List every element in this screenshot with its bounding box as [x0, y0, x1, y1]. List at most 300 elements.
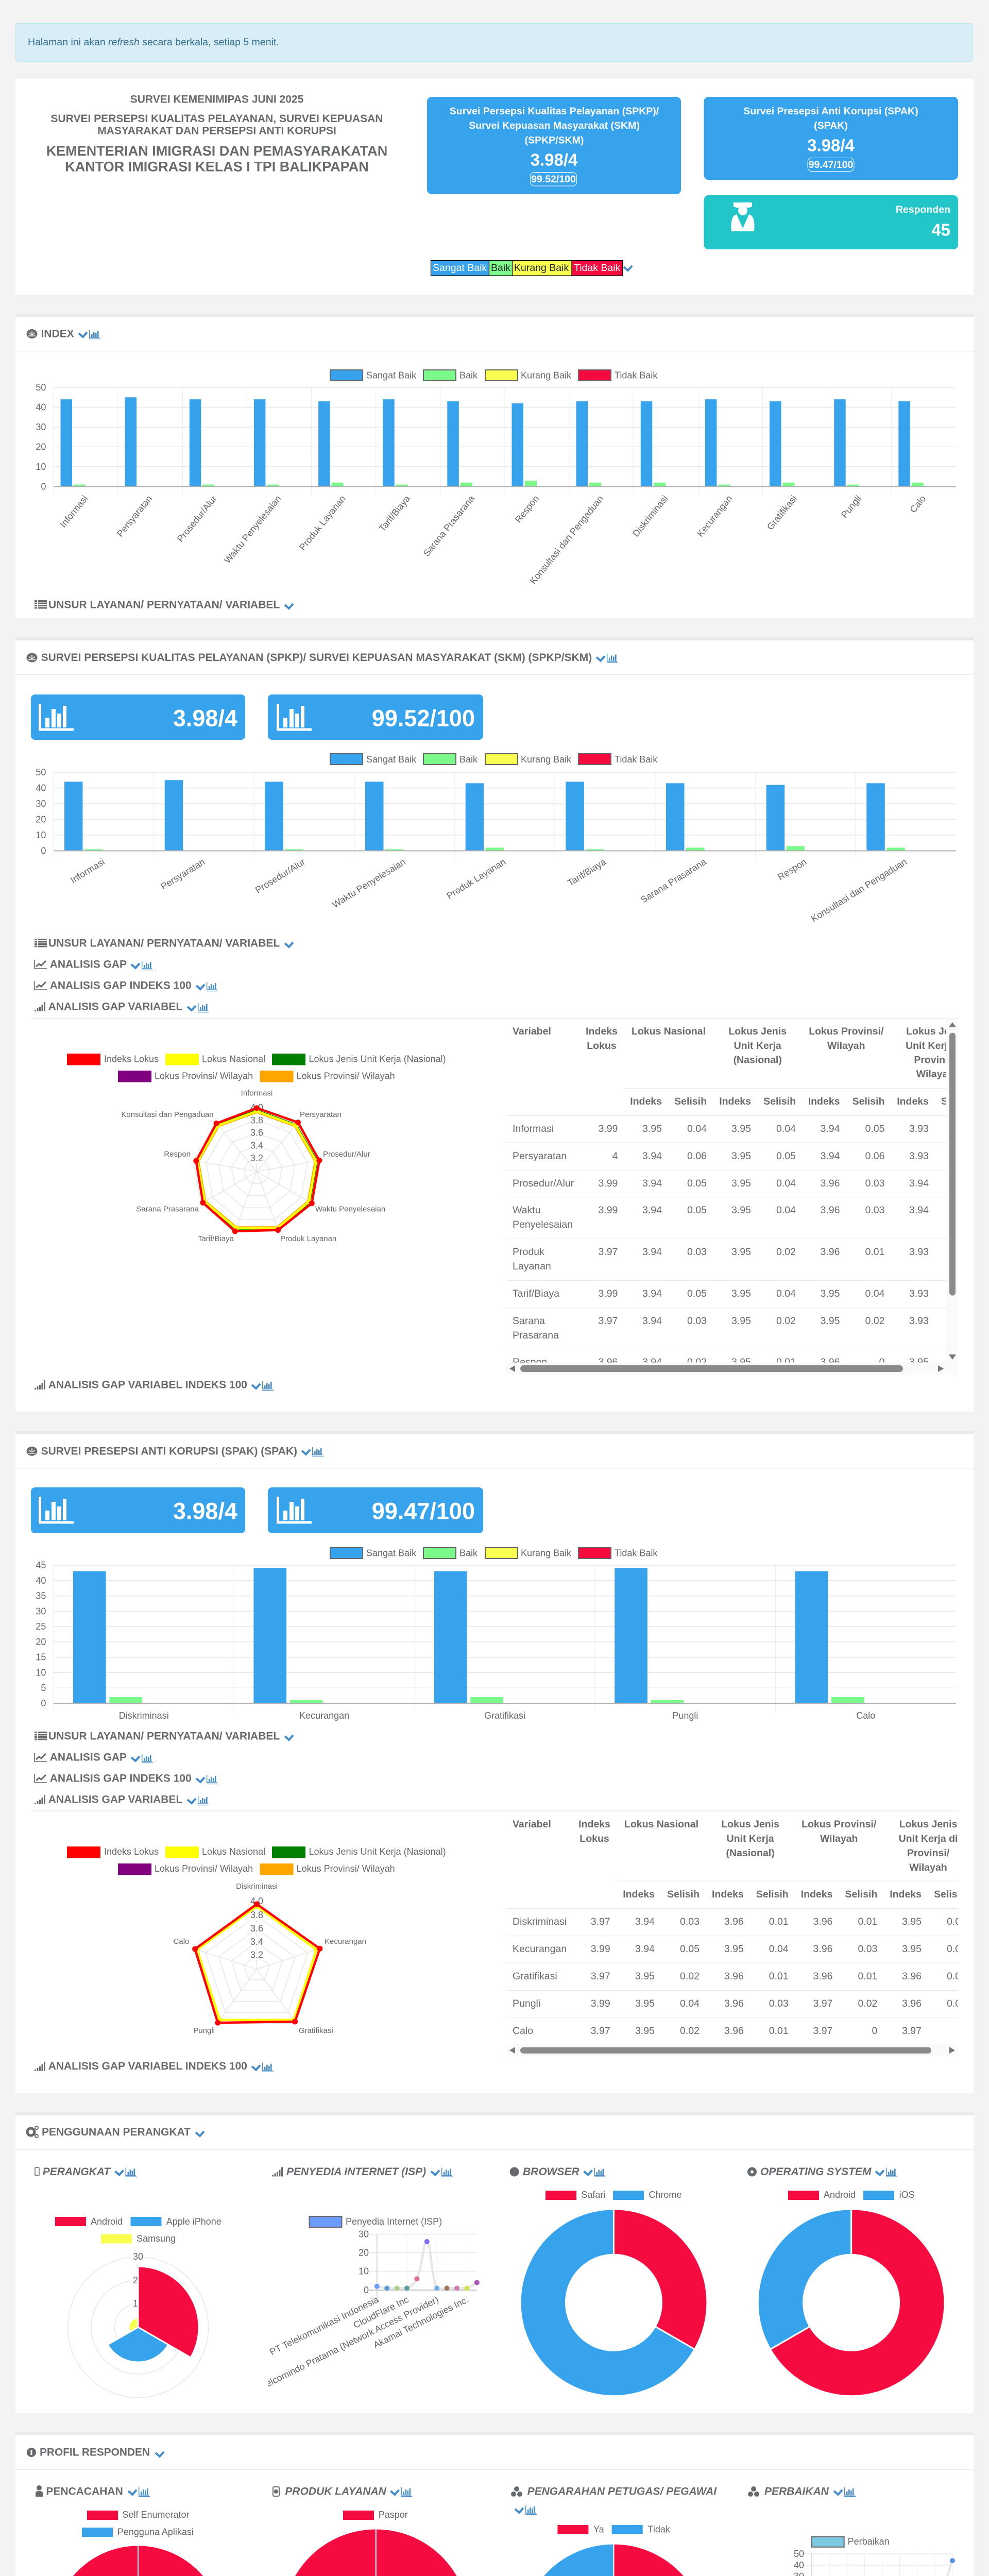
table: gap variabel SPAK: 3.97	[591, 1916, 610, 1927]
heading: analisis gap: ANALISIS GAP	[50, 1752, 127, 1763]
table: gap variabel: 0.04	[865, 1288, 885, 1299]
table: gap variabel: Indeks	[630, 1096, 662, 1107]
table: gap variabel SPAK: Indeks	[712, 1889, 744, 1900]
table: gap variabel: 0.02	[776, 1315, 796, 1327]
table: gap variabel SPAK: Unit Kerja	[727, 1833, 774, 1844]
table: gap variabel: Waktu	[513, 1205, 541, 1216]
table: gap variabel: 3.94	[642, 1178, 662, 1189]
line chart: ISP: 0	[364, 2285, 369, 2295]
table: gap variabel: Prasarana	[513, 1330, 559, 1341]
radar legend: Lokus Jenis Unit Kerja (Nasional)	[309, 1054, 446, 1064]
legend: pengarahan: Ya	[593, 2524, 605, 2534]
subheading: pengarahan petugas	[511, 2485, 717, 2515]
heading: analisis gap indeks 100: ANALISIS GAP INDEKS 100	[50, 1772, 192, 1785]
card: SPKP/SKM score: Survei Persepsi Kualitas Pelayanan (SPKP)/	[450, 106, 659, 117]
table: gap variabel SPAK: 3.94	[635, 1943, 655, 1955]
bar chart: SPKP/SKM elements: 50	[36, 767, 46, 777]
heading: unsur layanan: UNSUR LAYANAN/ PERNYATAAN/ VARIABEL	[48, 599, 280, 611]
table: gap variabel: 3.94	[642, 1315, 662, 1327]
table: gap variabel SPAK: 3.99	[591, 1943, 610, 1955]
title block: SURVEI PERSEPSI KUALITAS PELAYANAN, SURVEI KEPUASAN	[51, 113, 383, 125]
bar chart: index by element: 50	[36, 382, 46, 393]
table: gap variabel SPAK: 3.96	[813, 1916, 832, 1927]
bar chart: SPKP/SKM elements: Waktu Penyelesaian	[330, 857, 407, 910]
radar chart: service variables: Produk Layanan	[280, 1234, 336, 1243]
table: gap variabel: 3.94	[909, 1205, 929, 1216]
table: gap variabel SPAK: 0.03	[680, 1916, 700, 1927]
legend: rating categories: Tidak Baik	[574, 262, 621, 274]
table: gap variabel: 3.94	[821, 1150, 840, 1162]
table: gap variabel: 3.99	[598, 1178, 618, 1189]
radar legend: Indeks Lokus	[104, 1846, 159, 1857]
bar chart: index by element: Gratifikasi	[765, 494, 799, 532]
chart legend: Tidak Baik	[615, 370, 658, 380]
table: gap variabel: 3.94	[642, 1288, 662, 1299]
table: gap variabel SPAK: 3.95	[635, 1971, 655, 1982]
bar chart: SPKP/SKM elements: Prosedur/Alur	[253, 857, 307, 895]
subheading: pengarahan petugas: PENGARAHAN PETUGAS/ PEGAWAI	[527, 2485, 717, 2498]
legend: perangkat: Samsung	[137, 2233, 176, 2244]
doughnut chart: operating system	[758, 2209, 945, 2396]
table: gap variabel SPAK: 3.96	[724, 1916, 744, 1927]
heading: analisis gap	[35, 1752, 153, 1763]
table: gap variabel SPAK: Lokus Provinsi/	[802, 1819, 877, 1830]
table: gap variabel SPAK: 0	[872, 2025, 878, 2037]
table: gap variabel: 0.05	[687, 1288, 707, 1299]
title block: MASYARAKAT DAN PERSEPSI ANTI KORUPSI	[97, 125, 336, 137]
radar chart: service variables: 3.6	[250, 1127, 263, 1138]
table: gap variabel: Sarana	[513, 1315, 545, 1327]
subheading: perbaikan: PERBAIKAN	[764, 2485, 829, 2498]
bar chart: index by element: Diskriminasi	[630, 494, 670, 539]
table: gap variabel SPAK: Lokus Nasional	[624, 1819, 698, 1830]
radar chart: service variables: Informasi	[241, 1089, 272, 1097]
stat: score out of 100: 99.47/100	[372, 1498, 475, 1524]
legend: rating categories: Baik	[491, 262, 510, 274]
radar chart: anti-corruption variables: 3.6	[250, 1923, 263, 1934]
line chart: ISP: 20	[359, 2247, 369, 2258]
heading: analisis gap indeks 100: ANALISIS GAP INDEKS 100	[50, 980, 192, 991]
bar chart: index by element: Respon	[513, 494, 541, 525]
table: gap variabel: Indeks	[586, 1026, 618, 1037]
chart legend	[330, 1548, 658, 1558]
table: gap variabel SPAK: 0.02	[680, 1971, 700, 1982]
table: gap variabel SPAK: 3.95	[902, 1943, 922, 1955]
table: gap variabel: 3.94	[642, 1246, 662, 1258]
table: gap variabel: 0.03	[865, 1205, 885, 1216]
bar chart: index by element: 20	[36, 442, 46, 452]
doughnut chart: pencacahan	[74, 2546, 202, 2576]
table: gap variabel: 3.96	[821, 1246, 840, 1258]
table: gap variabel: 0.04	[776, 1178, 796, 1189]
table: gap variabel: 3.95	[731, 1178, 751, 1189]
chart legend: Sangat Baik	[366, 754, 417, 765]
bar chart: index by element: Waktu Penyelesaian	[222, 494, 283, 565]
table: gap variabel SPAK: Selisih	[934, 1889, 966, 1900]
legend: operating system: iOS	[899, 2190, 915, 2200]
stat: score out of 100	[268, 694, 483, 740]
heading: SPKP/SKM: SURVEI PERSEPSI KUALITAS PELAYANAN (SPKP)/ SURVEI KEPUASAN MASYARAKAT (SKM) (SPKP/SKM)	[41, 652, 592, 664]
table: gap variabel SPAK: (Nasional)	[726, 1848, 775, 1859]
table: gap variabel SPAK: 3.97	[902, 2025, 922, 2037]
table: gap variabel: 3.94	[909, 1178, 929, 1189]
table: gap variabel SPAK: 0.01	[858, 1916, 877, 1927]
heading: analisis gap variabel indeks 100: ANALISIS GAP VARIABEL INDEKS 100	[48, 2060, 247, 2072]
subheading: perbaikan	[748, 2485, 856, 2498]
stat: score out of 4	[31, 1487, 245, 1533]
table: gap variabel SPAK: 3.95	[724, 1943, 744, 1955]
stat: score out of 100	[268, 1487, 483, 1533]
panel: INDEX	[15, 314, 974, 618]
scrollbars	[506, 1019, 958, 1375]
bar chart: SPKP/SKM elements: Tarif/Biaya	[566, 856, 608, 888]
radar legend: Lokus Provinsi/ Wilayah	[297, 1071, 395, 1081]
chart legend	[330, 754, 658, 765]
bar chart: SPAK elements: Kecurangan	[299, 1710, 349, 1721]
table: gap variabel: 0	[879, 1357, 885, 1368]
table: gap variabel SPAK: 0.04	[769, 1943, 789, 1955]
chart legend: Sangat Baik	[366, 1548, 417, 1558]
legend: rating categories: Kurang Baik	[514, 262, 569, 274]
bar chart: index by element: 30	[36, 422, 46, 432]
radar legend: Lokus Jenis Unit Kerja (Nasional)	[309, 1846, 446, 1857]
table: gap variabel SPAK: Selisih	[756, 1889, 789, 1900]
table: gap variabel: 0.03	[865, 1178, 885, 1189]
table: gap variabel: Unit Kerja di	[906, 1040, 965, 1052]
table: gap variabel SPAK: 3.95	[635, 2025, 655, 2037]
table: gap variabel SPAK: Lokus Jenis	[721, 1819, 779, 1830]
table: gap variabel SPAK: Indeks	[890, 1889, 922, 1900]
radar chart: anti-corruption variables: 3.8	[250, 1910, 263, 1920]
subheading: perangkat	[35, 2166, 137, 2178]
table: gap variabel: Variabel	[513, 1026, 551, 1037]
table: gap variabel: 3.94	[821, 1123, 840, 1134]
card: SPAK score: 99.47/100	[809, 159, 854, 171]
pie chart: produk layanan	[283, 2530, 469, 2576]
radar chart: service variables: 3.8	[250, 1115, 263, 1126]
table: gap variabel: 3.94	[642, 1357, 662, 1368]
card: SPAK score: (SPAK)	[814, 120, 848, 131]
table: gap variabel: 3.97	[598, 1315, 618, 1327]
radar legend: Indeks Lokus	[104, 1054, 159, 1064]
bar chart: index by element: Informasi	[58, 494, 90, 530]
table: gap variabel SPAK: Diskriminasi	[513, 1916, 567, 1927]
table: gap variabel: 3.96	[598, 1357, 618, 1368]
radar chart: service variables: Sarana Prasarana	[136, 1205, 199, 1213]
bar chart: SPAK elements: 5	[41, 1683, 46, 1693]
table: gap variabel SPAK: 3.95	[635, 1998, 655, 2009]
radar legend: Lokus Provinsi/ Wilayah	[155, 1071, 253, 1081]
legend: perangkat	[55, 2216, 221, 2244]
line chart: ISP: PT Telcomindo Pratama (Network Access Provider)	[247, 2294, 440, 2397]
radar legend: Lokus Nasional	[202, 1846, 265, 1857]
card: SPKP/SKM score	[427, 97, 681, 194]
radar legend	[67, 1054, 446, 1082]
alert: refresh notice: Halaman ini akan refresh secara berkala, setiap 5 menit.	[28, 37, 279, 48]
subheading: perangkat: PERANGKAT	[43, 2166, 111, 2178]
table: gap variabel SPAK: Wilayah	[909, 1862, 947, 1873]
table: gap variabel: Tarif/Biaya	[513, 1288, 559, 1299]
table: gap variabel: 3.95	[909, 1357, 929, 1368]
table: gap variabel: 0.03	[687, 1246, 707, 1258]
table: gap variabel: 3.96	[821, 1357, 840, 1368]
card: SPKP/SKM score: (SPKP/SKM)	[525, 135, 584, 146]
table: gap variabel SPAK: 3.97	[591, 1971, 610, 1982]
polar area chart: perangkat: 30	[133, 2251, 143, 2262]
table: gap variabel SPAK: 3.95	[902, 1916, 922, 1927]
table: gap variabel: 3.96	[821, 1205, 840, 1216]
bar chart: index by element: 40	[36, 402, 46, 412]
bar chart: index by element: 0	[41, 481, 46, 492]
table: gap variabel SPAK: Indeks	[801, 1889, 833, 1900]
table: gap variabel: (Nasional)	[734, 1054, 782, 1065]
table: gap variabel: Lokus Nasional	[632, 1026, 706, 1037]
radar chart: service variables: Prosedur/Alur	[323, 1150, 370, 1159]
table: gap variabel SPAK: 3.97	[813, 1998, 832, 2009]
radar chart: service variables: 3.2	[250, 1153, 263, 1163]
line chart: ISP: 10	[359, 2266, 369, 2276]
table: gap variabel SPAK: Pungli	[513, 1998, 540, 2009]
table: gap variabel SPAK: 3.96	[813, 1971, 832, 1982]
doughnut chart: browser	[520, 2209, 707, 2396]
table: gap variabel SPAK: 0.03	[858, 1943, 877, 1955]
table: gap variabel SPAK: 3.99	[591, 1998, 610, 2009]
radar chart: service variables: Konsultasi dan Pengaduan	[121, 1110, 214, 1119]
subheading: browser: BROWSER	[523, 2166, 580, 2178]
bar chart: index by element	[36, 382, 956, 586]
table: gap variabel: 3.99	[598, 1205, 618, 1216]
table: gap variabel SPAK: 3.96	[902, 1998, 922, 2009]
table: gap variabel SPAK: 3.94	[635, 1916, 655, 1927]
legend: ISP	[309, 2216, 442, 2227]
table: gap variabel: 3.95	[821, 1288, 840, 1299]
table: gap variabel SPAK: Indeks	[623, 1889, 655, 1900]
table: gap variabel SPAK: 0.04	[680, 1998, 700, 2009]
radar legend	[67, 1846, 446, 1875]
table: gap variabel SPAK: 0.03	[769, 1998, 789, 2009]
legend: perangkat: Android	[91, 2216, 123, 2227]
bar chart: SPKP/SKM elements: Konsultasi dan Pengaduan	[809, 857, 909, 924]
radar chart: anti-corruption variables	[174, 1882, 366, 2035]
table: gap variabel: 0.04	[776, 1205, 796, 1216]
table: gap variabel: 0.01	[776, 1357, 796, 1368]
line chart: perbaikan	[794, 2550, 955, 2576]
bar chart: SPAK elements: 20	[36, 1637, 46, 1647]
bar chart: SPAK elements: 15	[36, 1652, 46, 1663]
table: gap variabel SPAK: 0.01	[769, 1971, 789, 1982]
table: gap variabel: 3.95	[731, 1315, 751, 1327]
line chart: ISP: CloudFlare Inc	[352, 2294, 410, 2330]
table: gap variabel SPAK: 3.96	[724, 2025, 744, 2037]
chart legend: Tidak Baik	[615, 754, 658, 765]
table: gap variabel: 3.94	[642, 1205, 662, 1216]
title block: KEMENTERIAN IMIGRASI DAN PEMASYARAKATAN	[46, 143, 387, 159]
bar chart: SPKP/SKM elements: 40	[36, 783, 46, 793]
chart legend: Baik	[459, 370, 478, 380]
card: SPAK score: 3.98/4	[807, 136, 855, 155]
table: gap variabel: 3.95	[731, 1246, 751, 1258]
table: gap variabel SPAK: Calo	[513, 2025, 533, 2037]
table: gap variabel: Provinsi/	[914, 1054, 957, 1065]
table: gap variabel: Indeks	[808, 1096, 840, 1107]
heading: index	[27, 328, 100, 340]
line chart: ISP: Akamai Technologies Inc.	[372, 2294, 470, 2350]
table: gap variabel: 3.93	[909, 1246, 929, 1258]
legend: pencacahan: Pengguna Aplikasi	[117, 2527, 194, 2537]
table: gap variabel SPAK: Lokus Jenis	[899, 1819, 958, 1830]
heading: SPAK: SURVEI PRESEPSI ANTI KORUPSI (SPAK) (SPAK)	[41, 1445, 297, 1457]
card: respondents: Responden	[896, 204, 950, 215]
legend: ISP: Penyedia Internet (ISP)	[346, 2216, 442, 2227]
table: gap variabel SPAK	[506, 1819, 966, 2056]
bar chart: index by element: Prosedur/Alur	[175, 494, 219, 544]
bar chart: SPKP/SKM elements: Informasi	[69, 857, 107, 886]
heading: analisis gap variabel indeks 100: ANALISIS GAP VARIABEL INDEKS 100	[48, 1379, 247, 1391]
heading: unsur layanan: UNSUR LAYANAN/ PERNYATAAN/ VARIABEL	[48, 938, 280, 949]
chart legend	[330, 370, 658, 381]
table: gap variabel SPAK: 0.01	[769, 2025, 789, 2037]
title block: SURVEI KEMENIMIPAS JUNI 2025	[130, 94, 304, 105]
line chart: perbaikan: 40	[794, 2560, 804, 2570]
radar chart: anti-corruption variables: Pungli	[193, 2026, 215, 2035]
card: respondents: 45	[931, 221, 950, 239]
table: gap variabel: 3.95	[642, 1123, 662, 1134]
table: gap variabel SPAK: 3.96	[724, 1998, 744, 2009]
table: gap variabel: Produk	[513, 1246, 544, 1258]
heading: analisis gap: ANALISIS GAP	[50, 958, 127, 971]
table: gap variabel SPAK: Unit Kerja di	[899, 1833, 958, 1844]
bar chart: index by element: 10	[36, 462, 46, 472]
bar chart: SPKP/SKM elements: 10	[36, 830, 46, 840]
bar chart: SPKP/SKM elements: Sarana Prasarana	[639, 856, 708, 905]
panel: SPAK survey	[15, 1431, 974, 2093]
bar chart: index by element: Calo	[908, 494, 928, 515]
table: gap variabel: 4	[612, 1150, 618, 1162]
table: gap variabel: 3.95	[731, 1205, 751, 1216]
table: gap variabel: Lokus Jenis	[728, 1026, 787, 1037]
table: gap variabel: Penyelesaian	[513, 1219, 573, 1230]
icon: user secret	[731, 202, 755, 231]
subheading: operating system: OPERATING SYSTEM	[760, 2166, 872, 2178]
radar chart: anti-corruption variables: 3.2	[250, 1950, 263, 1960]
table: gap variabel SPAK: Wilayah	[820, 1833, 858, 1844]
heading: index: INDEX	[41, 328, 74, 340]
radar chart: anti-corruption variables: Diskriminasi	[236, 1882, 278, 1891]
table: gap variabel SPAK: 3.97	[813, 2025, 832, 2037]
table: gap variabel: 3.96	[821, 1178, 840, 1189]
bar chart: index by element: Kecurangan	[695, 494, 735, 539]
table: gap variabel: 3.93	[909, 1315, 929, 1327]
line chart: ISP: PT Telekomunikasi Indonesia	[268, 2294, 381, 2357]
table: gap variabel: Layanan	[513, 1261, 551, 1272]
table: gap variabel: 0.04	[776, 1288, 796, 1299]
chart legend: Kurang Baik	[521, 1548, 572, 1558]
bar chart: SPKP/SKM elements: 20	[36, 814, 46, 824]
horizontal scrollbar	[506, 2044, 958, 2056]
bar chart: index by element: Produk Layanan	[297, 494, 348, 552]
radar chart: service variables: Persyaratan	[300, 1110, 342, 1119]
radar legend: Lokus Provinsi/ Wilayah	[297, 1863, 395, 1874]
bar chart: index by element: Konsultasi dan Pengaduan	[528, 494, 605, 586]
table: gap variabel: 0.03	[687, 1315, 707, 1327]
table: gap variabel: Wilayah	[916, 1069, 954, 1080]
chart legend: Kurang Baik	[521, 370, 572, 380]
table: gap variabel: Selisih	[941, 1096, 974, 1107]
card: SPKP/SKM score: Survei Kepuasan Masyarakat (SKM)	[469, 120, 640, 131]
bar chart: index by element: Pungli	[839, 494, 863, 520]
table: gap variabel SPAK: 0.03	[947, 1998, 966, 2009]
table: gap variabel: 3.95	[821, 1315, 840, 1327]
table: gap variabel: 3.99	[598, 1288, 618, 1299]
bar chart: SPAK elements: 10	[36, 1667, 46, 1677]
card: SPKP/SKM score: 3.98/4	[531, 150, 578, 169]
subheading: produk layanan: PRODUK LAYANAN	[285, 2485, 387, 2498]
radar chart: service variables: 4.0	[250, 1103, 263, 1113]
table: gap variabel: Persyaratan	[513, 1150, 567, 1162]
bar chart: index by element: Tarif/Biaya	[377, 493, 413, 534]
radar chart: service variables: Respon	[164, 1150, 191, 1159]
bar chart: SPKP/SKM elements: Persyaratan	[159, 857, 207, 892]
legend: perbaikan: Perbaikan	[848, 2536, 890, 2547]
table: gap variabel: 3.93	[909, 1123, 929, 1134]
legend: browser: Safari	[581, 2190, 605, 2200]
table: gap variabel: 0.05	[776, 1150, 796, 1162]
heading: analisis gap variabel: ANALISIS GAP VARIABEL	[48, 1794, 182, 1805]
table: gap variabel: 3.94	[642, 1150, 662, 1162]
table: gap variabel SPAK: 3.97	[591, 2025, 610, 2037]
bar chart: SPKP/SKM elements: 30	[36, 799, 46, 809]
heading: profil responden: PROFIL RESPONDEN	[40, 2446, 150, 2459]
table: gap variabel SPAK: 3.96	[724, 1971, 744, 1982]
heading: analisis gap variabel: ANALISIS GAP VARIABEL	[48, 1001, 182, 1013]
bar chart: SPAK elements: 0	[41, 1698, 46, 1708]
stat: score out of 4: 3.98/4	[173, 1498, 237, 1524]
table: gap variabel: 3.95	[731, 1150, 751, 1162]
table: gap variabel SPAK: Kecurangan	[513, 1943, 567, 1955]
table: gap variabel SPAK: Gratifikasi	[513, 1971, 557, 1982]
table: gap variabel: 3.95	[731, 1123, 751, 1134]
heading: analisis gap	[35, 958, 153, 971]
legend: operating system	[788, 2190, 915, 2200]
bar chart: index by element: Sarana Prasarana	[421, 493, 477, 558]
legend: rating categories	[431, 261, 632, 276]
chart legend: Baik	[459, 754, 478, 765]
bar chart: SPAK elements: Gratifikasi	[484, 1710, 525, 1721]
bar chart: SPKP/SKM elements: Respon	[776, 857, 808, 882]
radar chart: service variables: Tarif/Biaya	[198, 1234, 234, 1243]
card: SPAK score	[704, 97, 958, 180]
table: gap variabel SPAK: Variabel	[513, 1819, 551, 1830]
line chart: ISP	[247, 2229, 480, 2397]
radar legend: Lokus Nasional	[202, 1054, 265, 1064]
table: gap variabel: 0.01	[865, 1246, 885, 1258]
table: gap variabel SPAK: 0.04	[947, 1943, 966, 1955]
table: gap variabel: 0.06	[865, 1150, 885, 1162]
pie chart: pengarahan	[520, 2544, 707, 2576]
subheading: pencacahan: PENCACAHAN	[46, 2485, 123, 2498]
stat: score out of 4: 3.98/4	[173, 705, 237, 732]
table: gap variabel: 0.02	[776, 1246, 796, 1258]
bar chart: SPAK elements: 35	[36, 1591, 46, 1601]
radar chart: service variables: Waktu Penyelesaian	[315, 1205, 385, 1213]
polar area chart: perangkat: 10	[133, 2298, 143, 2309]
table: gap variabel: 0.05	[865, 1123, 885, 1134]
radar chart: service variables	[121, 1089, 385, 1243]
table: gap variabel: Unit Kerja	[734, 1040, 781, 1052]
heading: unsur layanan: UNSUR LAYANAN/ PERNYATAAN/ VARIABEL	[48, 1730, 280, 1742]
table: gap variabel: Wilayah	[827, 1040, 865, 1052]
legend: perbaikan	[812, 2536, 890, 2547]
